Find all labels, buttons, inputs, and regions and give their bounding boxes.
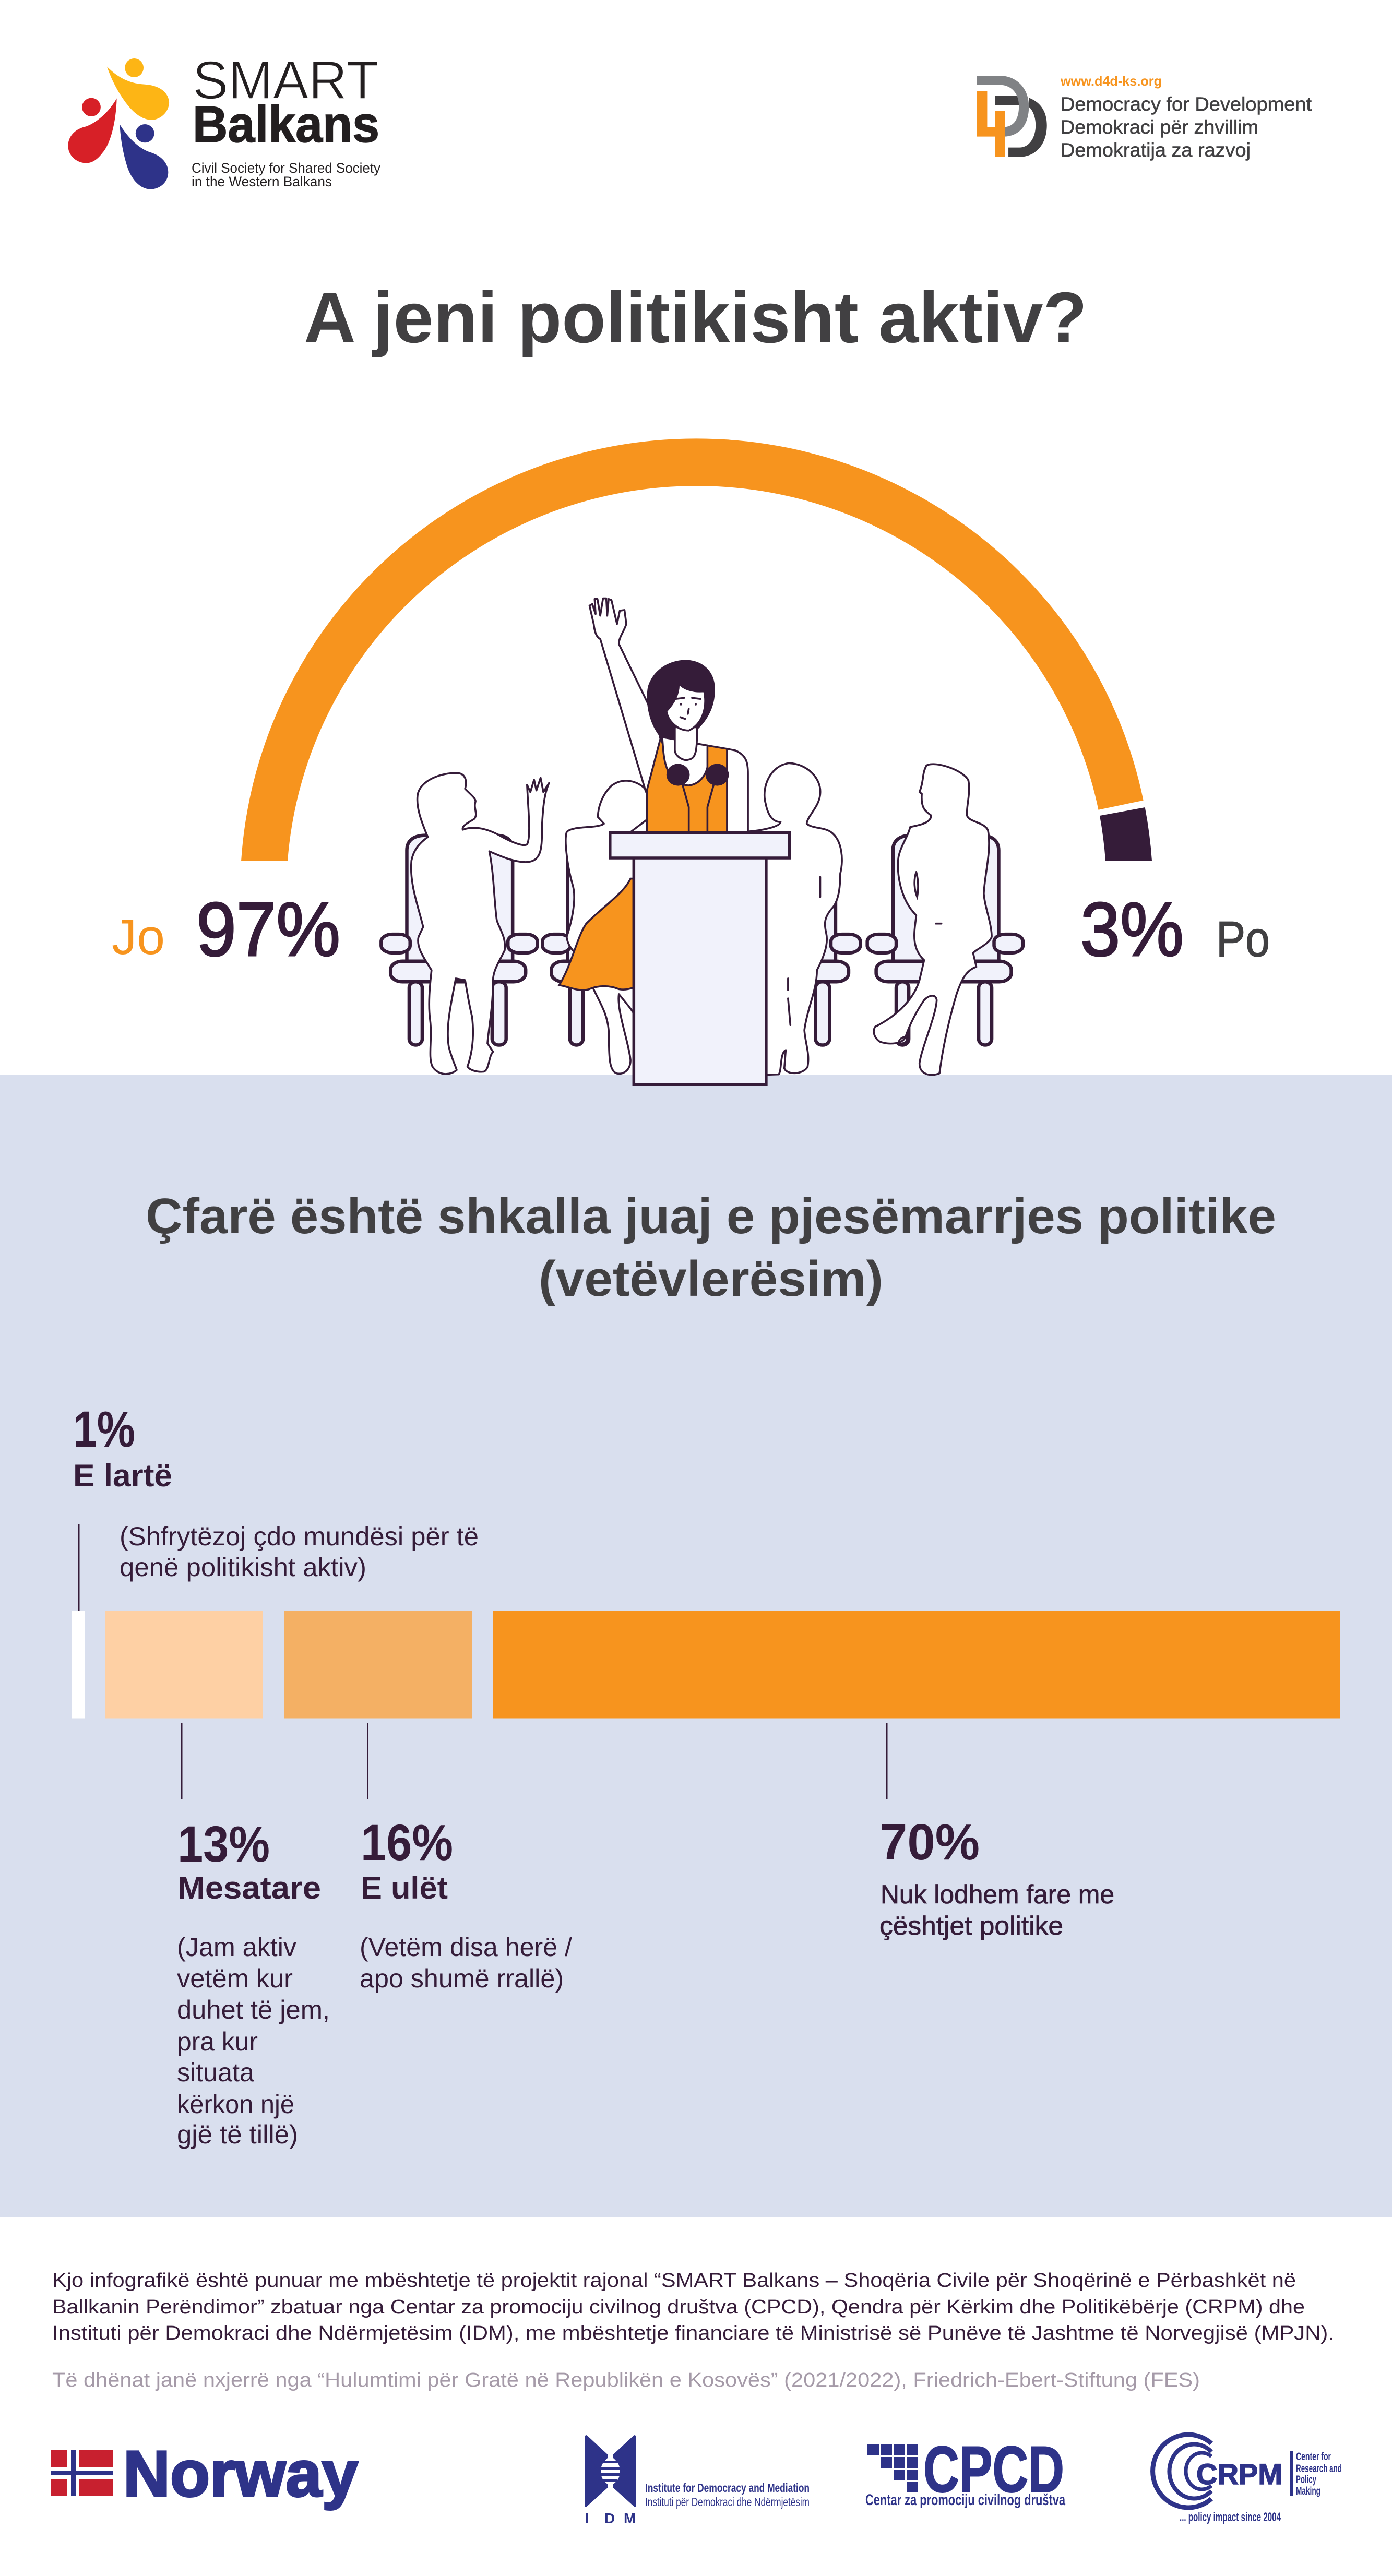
logo: IDM: Instituti për Demokraci dhe Ndërmjetësim (645, 2495, 810, 2509)
logo: CRPM: CRPM (1196, 2458, 1282, 2490)
logo: CPCD: Centar za promociju civilnog društva (865, 2491, 1065, 2509)
logo: Democracy for Development: Demokraci për zhvillim (1061, 116, 1258, 138)
footer: project description: Instituti për Demokraci dhe Ndërmjetësim (IDM), me mbështetje financiare të Ministrisë së Punëve të Jashtme të Norvegjisë (MPJN). (52, 2322, 1334, 2344)
callout: 13% Mesatare: gjë të tillë) (177, 2120, 298, 2149)
neck (675, 727, 697, 760)
bar: E ulët 16% (284, 1611, 472, 1718)
logo: IDM (585, 2435, 810, 2526)
heading: participation level (146, 1188, 1276, 1307)
logo: Democracy for Development: www.d4d-ks.org (1060, 73, 1162, 89)
callout: 13% Mesatare: Mesatare (177, 1870, 321, 1905)
callout: 1% E lartë: (Shfrytëzoj çdo mundësi për të (120, 1522, 479, 1551)
footer: data source: Të dhënat janë nxjerrë nga “Hulumtimi për Gratë në Republikën e Kosovës” (2021/2022), Friedrich-Ebert-Stiftung (FES) (52, 2369, 1200, 2391)
person: right of podium (749, 763, 842, 1075)
label: Po: Po (1216, 911, 1270, 967)
callout: 13% Mesatare: vetëm kur (177, 1964, 293, 1993)
callout: 13% Mesatare: duhet të jem, (177, 1995, 330, 2024)
callout: 13% Mesatare: situata (177, 2058, 254, 2087)
logo: IDM: I (585, 2510, 589, 2526)
callout: 16% E ulët: apo shumë rrallë) (360, 1964, 564, 1993)
callout: 70% (879, 1723, 1114, 1940)
chair: left (381, 836, 537, 1045)
bar chart: participation levels (72, 1611, 1340, 1718)
chair: right (867, 836, 1023, 1045)
callout: 1% E lartë (73, 1401, 479, 1611)
callout: 70%: 70% (879, 1814, 980, 1870)
callout: 1% E lartë: 1% (73, 1401, 135, 1458)
logo: Norway: Norway (123, 2438, 358, 2510)
logo: IDM: D (604, 2510, 615, 2526)
title: A jeni politikisht aktiv? (304, 278, 1087, 358)
callout: 13% Mesatare: 13% (177, 1816, 270, 1873)
logo: IDM: Institute for Democracy and Mediation (645, 2481, 810, 2495)
podium (610, 833, 790, 1084)
chest (662, 737, 707, 785)
logo: CRPM: ... policy impact since 2004 (1180, 2510, 1281, 2524)
icon: Norwegian flag (51, 2450, 113, 2496)
logo: CRPM: Center for (1296, 2451, 1331, 2463)
speaker: woman with raised arm (559, 599, 748, 990)
value: 3%: 3% (1080, 887, 1184, 972)
gauge segment: Jo 97% (241, 438, 1144, 861)
heading: participation level: Çfarë është shkalla juaj e pjesëmarrjes politike (146, 1188, 1276, 1244)
logo: Democracy for Development: Democracy for Development (1061, 93, 1312, 115)
callout: 13% Mesatare: pra kur (177, 2027, 258, 2056)
icon: concentric arcs (1153, 2435, 1211, 2508)
heading: participation level: (vetëvlerësim) (539, 1251, 883, 1307)
bar: E lartë 1% (72, 1611, 85, 1718)
icon: squares (867, 2444, 918, 2492)
callout: 16% E ulët: E ulët (361, 1870, 448, 1905)
callout: 70%: çështjet politike (879, 1911, 1063, 1940)
footer: project description: Ballkanin Perëndimor” zbatuar nga Centar za promociju civilnog društva (CPCD), Qendra për Kërkim dhe Politikëbërje (CRPM) dhe (52, 2296, 1305, 2318)
skirt (559, 879, 634, 990)
callout: 16% E ulët: (Vetëm disa herë / (360, 1933, 572, 1962)
logo: Democracy for Development: Demokratija za razvoj (1061, 139, 1251, 161)
raised arm (589, 599, 661, 794)
person: centre, seated behind podium (566, 781, 665, 1074)
callout: 16% E ulët: 16% (361, 1814, 453, 1871)
callout: 13% Mesatare: (Jam aktiv (177, 1933, 296, 1962)
logo: CRPM: Making (1296, 2485, 1320, 2497)
logo: SMART Balkans (68, 50, 380, 189)
logo: Democracy for Development (977, 73, 1312, 161)
footer: project description (52, 2270, 1334, 2344)
logo: CRPM: Policy (1296, 2474, 1316, 2486)
logo: SMART Balkans: SMART (193, 50, 379, 110)
icon: IDM hourglass (585, 2435, 636, 2507)
logo: SMART Balkans: Balkans (193, 96, 379, 153)
callout: 1% E lartë: E lartë (73, 1458, 172, 1493)
microphone: left (667, 764, 689, 832)
callout: 16% E ulët (360, 1723, 572, 1993)
logo: CRPM: Research and (1296, 2463, 1342, 2475)
microphone: right (706, 764, 729, 832)
callout: 1% E lartë: qenë politikisht aktiv) (120, 1553, 366, 1582)
logo: CRPM (1153, 2435, 1342, 2524)
logo: CPCD: CPCD (923, 2434, 1064, 2506)
label: Jo: Jo (112, 909, 165, 965)
value: 97%: 97% (196, 887, 340, 972)
face (667, 682, 705, 731)
callout: 13% Mesatare (177, 1723, 330, 2149)
hair (647, 660, 715, 741)
chart: semicircle gauge (241, 438, 1152, 861)
right arm (727, 749, 748, 832)
logo: IDM: M (624, 2510, 636, 2526)
bar: Mesatare 13% (105, 1611, 263, 1718)
person: left, hand raised (411, 773, 549, 1074)
panel: political participation (0, 1075, 1392, 2217)
person: far right, legs crossed (874, 764, 992, 1075)
logo: SMART Balkans: Civil Society for Shared Society (192, 160, 380, 176)
icon: D4D mark (977, 76, 1047, 157)
logo: CPCD (865, 2434, 1065, 2509)
callout: 13% Mesatare: kërkon një (177, 2090, 294, 2119)
dress top (647, 737, 727, 832)
callout: 70%: Nuk lodhem fare me (881, 1880, 1114, 1909)
facial features (676, 698, 700, 719)
gauge segment: Po 3% (1100, 807, 1152, 861)
illustration: woman speaking at podium to seated audience (381, 599, 1023, 1084)
chair: centre (542, 836, 860, 1045)
icon: three figures (68, 58, 169, 189)
footer: project description: Kjo infografikë është punuar me mbështetje të projektit rajonal “SMART Balkans – Shoqëria Civile për Shoqërinë e Përbashkët në (52, 2270, 1296, 2292)
bar: Nuk lodhem 70% (493, 1611, 1340, 1718)
logo: SMART Balkans: in the Western Balkans (192, 174, 332, 189)
